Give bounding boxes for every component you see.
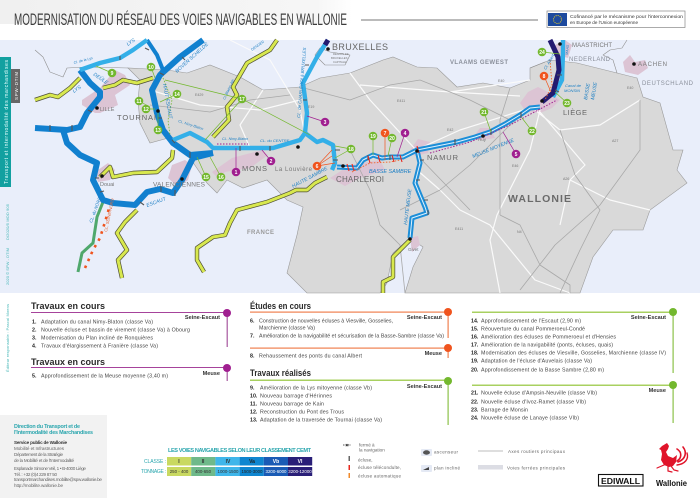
- numbered markers: 23: [564, 101, 570, 107]
- place names: MONS: [242, 164, 267, 173]
- place names: AACHEN: [638, 62, 667, 68]
- panel: travaux réalisés Seine-Escaut 9-13: 10.: [250, 394, 258, 400]
- locks: [50, 48, 562, 215]
- waterway names: Cl. de la Lys: [73, 56, 93, 65]
- place names: Douai: [100, 182, 114, 188]
- panel: travaux réalisés Meuse: Barrage de Monsin: [481, 408, 528, 414]
- waterway: yellow class I canals: [35, 40, 410, 293]
- panel: travaux réalisés Seine-Escaut 14-20: 19.: [471, 358, 479, 364]
- contact box: http://mobilite.wallonie.be: [14, 483, 63, 488]
- place names: E40: [627, 86, 633, 90]
- panel: travaux réalisés Seine-Escaut 9-13: Nouveau barrage de Kain: [260, 402, 324, 408]
- panel: travaux en cours Seine-Escaut: [31, 301, 231, 350]
- panel: travaux en cours Meuse: 5.: [32, 374, 37, 380]
- panel: travaux réalisés Seine-Escaut 14-20: Modernisation des écluses de Viesville, Gosselies, Marchienne (classe IV): [481, 350, 666, 356]
- waterway names: Cl. Albert: [543, 52, 556, 70]
- waterway names: Canal de: [565, 83, 582, 88]
- legend: waterway classes: 3200-6000: [266, 469, 287, 474]
- numbered markers: 24: [539, 50, 545, 56]
- panel: travaux réalisés Seine-Escaut 14-20: Amélioration des écluses de Pommeroeul et d'Hensies: [481, 334, 616, 340]
- legend: symbols: la navigation: [359, 448, 385, 452]
- panel: travaux réalisés Seine-Escaut 9-13: 9.: [250, 386, 255, 392]
- place names: E46: [512, 164, 518, 168]
- EU co-funding badge: [547, 11, 685, 28]
- waterway names: HAUTE SAMBRE: [291, 166, 329, 190]
- panel: travaux réalisés Seine-Escaut 9-13: 11.: [250, 402, 258, 408]
- place names: RÉGION DE: [333, 51, 349, 56]
- place names: E411: [397, 99, 405, 103]
- waterway names: DENDER: [250, 40, 265, 52]
- panel: travaux réalisés Seine-Escaut 14-20: 20.: [471, 368, 479, 374]
- panel: travaux réalisés Meuse: 21.: [471, 390, 479, 396]
- place names: N4: [517, 230, 522, 234]
- legend: symbols: Voies ferrées principales: [507, 466, 566, 470]
- panel: études en cours: 8.: [250, 354, 255, 360]
- legend: symbols: [343, 442, 566, 478]
- side label: 2020 © SPW - DTIM: [5, 248, 10, 285]
- panel: travaux réalisés Seine-Escaut 14-20: Amélioration de la navigabilité (ponts, écluses, quais): [481, 342, 613, 348]
- legend: waterway classes: 3200-12000: [288, 469, 312, 474]
- panel: travaux en cours Meuse: [31, 357, 231, 381]
- numbered markers: 3: [324, 120, 327, 126]
- panel: études en cours: Rehaussement des ponts du canal Albert: [259, 354, 363, 360]
- map: [0, 37, 700, 293]
- place names: Givet: [408, 247, 419, 252]
- legend: waterway classes: Va: [249, 459, 255, 465]
- numbered markers: 1: [235, 170, 238, 176]
- panel: travaux réalisés Seine-Escaut 9-13: Seine-Escaut: [407, 384, 442, 390]
- panel: travaux réalisés Seine-Escaut 9-13: 13.: [250, 418, 258, 424]
- place names: E429: [195, 93, 203, 97]
- panel: travaux en cours Seine-Escaut: 1.: [32, 320, 37, 326]
- panel: études en cours: Construction de nouvelles écluses à Viesville, Gosselies,: [259, 318, 393, 324]
- waterway names: BASSE SAMBRE: [369, 169, 412, 175]
- town dots: [95, 42, 636, 241]
- waterway names: HAUT ESCAUT: [161, 83, 173, 120]
- panel: travaux réalisés Seine-Escaut 14-20: 14.: [471, 318, 479, 324]
- works: dotted lines: [163, 60, 557, 172]
- place names: LIÈGE: [563, 108, 587, 117]
- side label: SPW-DTIM: [14, 72, 19, 100]
- numbered markers: 12: [143, 107, 149, 113]
- panel: études en cours: 6.: [250, 318, 255, 324]
- panel: travaux réalisés Seine-Escaut 9-13: Amélioration de la Lys mitoyenne (classe Vb): [260, 386, 372, 392]
- waterway names: MAAS: [565, 44, 570, 55]
- place names: La Louvière: [275, 167, 313, 173]
- numbered markers: 5: [515, 152, 518, 158]
- legend: waterway classes: CLASSE :: [144, 459, 166, 465]
- panel: travaux réalisés Seine-Escaut 14-20: Réouverture du canal Pommeroeul-Condé: [481, 326, 585, 332]
- numbered markers: 21: [481, 110, 487, 116]
- panel: travaux en cours Seine-Escaut: Seine-Escaut: [185, 315, 220, 321]
- side label: Éditeur responsable : Pascal Moens: [5, 304, 10, 372]
- panel: travaux réalisés Seine-Escaut 14-20: 17.: [471, 342, 479, 348]
- panel: travaux réalisés Seine-Escaut 9-13: 12.: [250, 410, 258, 416]
- panel: études en cours: [250, 301, 452, 360]
- side label: D/2020/5 MOD 905: [5, 203, 10, 240]
- panel: études en cours: Seine-Escaut: [407, 315, 442, 321]
- panel: travaux en cours Seine-Escaut: Travaux en cours: [31, 301, 105, 312]
- place names: CHARLEROI: [336, 175, 384, 184]
- numbered markers: 19: [370, 134, 376, 140]
- legend: symbols: Axes routiers principaux: [508, 449, 566, 454]
- legend: symbols: ×: [345, 443, 349, 449]
- waterway names: ESCAUT: [146, 196, 168, 209]
- waterway names: MONSIN: [564, 88, 580, 93]
- waterway names: BOVEN SCHELDE: [174, 41, 210, 74]
- contact box: Esplanade Simone Veil, 1 • B-4000 Liège: [14, 466, 86, 471]
- panel: études en cours: Meuse: [425, 351, 442, 357]
- place names: E19: [308, 105, 314, 109]
- panel: travaux réalisés Meuse: Meuse: [649, 388, 666, 394]
- legend: symbols: écluse automatique: [358, 474, 401, 478]
- waterway names: CL. Nimy-Blaton: [178, 119, 204, 131]
- place names: VALENCIENNES: [153, 182, 206, 188]
- place names: E42: [447, 128, 453, 132]
- legend: waterway classes: 1000-1500: [218, 469, 239, 474]
- numbered markers: 13: [155, 128, 161, 134]
- place names: [100, 42, 694, 252]
- panel: travaux réalisés Meuse: Nouvelle écluse de Lanaye (classe VIb): [481, 416, 579, 422]
- panel: travaux en cours Meuse: Travaux en cours: [31, 357, 105, 368]
- numbered markers: 17: [239, 97, 245, 103]
- numbered markers: 22: [529, 129, 535, 135]
- panel: travaux réalisés Seine-Escaut 14-20: Adaptation de l'écluse d'Auvelais (classe Va): [481, 358, 592, 364]
- legend: waterway classes: TONNAGE :: [141, 469, 166, 475]
- contact box: Tél. : +32 (0)4 229 87 50: [14, 472, 57, 477]
- waterway names: Cl. Blaton-Ath: [222, 79, 235, 100]
- place names: VLAAMS GEWEST: [450, 60, 508, 66]
- panel: travaux réalisés Seine-Escaut 14-20: Approfondissement de la Basse Sambre (2,80 m): [481, 368, 604, 374]
- waterway: green class II canal: [78, 202, 103, 272]
- leader lines: [96, 52, 567, 177]
- place names: NAMUR: [427, 153, 459, 162]
- panel: études en cours: Études en cours: [250, 301, 311, 312]
- place names: TOURNAI: [117, 113, 156, 122]
- panel: travaux réalisés Meuse: 24.: [471, 416, 479, 422]
- numbered markers: 2: [270, 159, 273, 165]
- legend: waterway classes: 250 - 400: [170, 469, 189, 474]
- legend: waterway classes: I: [178, 459, 180, 465]
- legend: waterway classes: Vb: [273, 459, 279, 465]
- panel: travaux réalisés Seine-Escaut 14-20: Seine-Escaut: [631, 315, 666, 321]
- waterway names: CL. de CHARLEROI à BRUXELLES: [296, 47, 307, 118]
- waterway: light blue class IV canals: [80, 40, 563, 170]
- contact box: l'Intermodalité des Marchandises: [14, 430, 93, 436]
- panel: travaux réalisés Meuse: 23.: [471, 408, 479, 414]
- EU co-funding badge: Cofinancé par le mécanisme pour l'interconnexion: [570, 14, 684, 19]
- place names: FRANCE: [247, 230, 274, 236]
- logo: Wallonie rooster: [656, 443, 688, 488]
- red closed-lock ticks: [347, 146, 419, 171]
- place names: A26: [563, 177, 569, 181]
- numbered markers: 11: [136, 99, 142, 105]
- panel: travaux réalisés Seine-Escaut 14-20: 15.: [471, 326, 479, 332]
- contact box: Service public de Wallonie: [14, 440, 67, 445]
- panel: études en cours: Amélioration de la navigabilité et sécurisation de la Basse-Sambre (classe Va): [259, 334, 444, 340]
- panel: travaux réalisés Seine-Escaut 9-13: Nouveau barrage d'Hérinnes: [260, 394, 332, 400]
- panel: travaux en cours Seine-Escaut: Adaptation du canal Nimy-Blaton (classe Va): [41, 320, 153, 326]
- side label: [0, 57, 20, 372]
- panel: études en cours: 7.: [250, 334, 255, 340]
- place names: E411: [455, 227, 463, 231]
- place names: LILLE: [100, 107, 115, 113]
- EU co-funding badge: en Europe de l'Union européenne: [570, 20, 639, 25]
- waterway names: BASSE: [583, 82, 592, 100]
- panel: travaux réalisés Seine-Escaut 9-13: Travaux réalisés: [250, 368, 311, 379]
- logo: Ediwall: EDIWALL: [601, 476, 640, 486]
- place names: WALLONIE: [508, 193, 571, 205]
- waterway names: CL. Nimy-Blaton: [222, 137, 248, 141]
- contact box: transportmarchandises.mobilite@spw.wallonie.be: [14, 477, 102, 482]
- numbered markers: 14: [174, 92, 180, 98]
- place names: Huy: [478, 137, 487, 142]
- legend: symbols: ascenseur: [434, 450, 458, 454]
- numbered markers: 10: [148, 65, 154, 71]
- legend: symbols: plan incliné: [434, 466, 460, 470]
- waterway names: LYS: [72, 84, 83, 95]
- place names: DEUTSCHLAND: [642, 81, 694, 87]
- contact box: de la Mobilité et de l'Intermodalité: [14, 458, 74, 463]
- numbered markers: 9: [111, 71, 114, 77]
- region: Wallonie: [128, 57, 687, 293]
- legend: waterway classes: 400-650: [195, 469, 212, 474]
- place names: BRUXELLES: [332, 42, 388, 52]
- panel: travaux en cours Meuse: Approfondissement de la Meuse moyenne (3,40 m): [41, 374, 168, 380]
- title: MODERNISATION DU RÉSEAU DES VOIES NAVIGABLES EN WALLONIE: [14, 10, 347, 29]
- place names: MAASTRICHT: [572, 43, 612, 49]
- panel: travaux en cours Seine-Escaut: 2.: [32, 328, 37, 334]
- panel: travaux en cours Seine-Escaut: 4.: [32, 344, 37, 350]
- numbered markers: 16: [218, 175, 224, 181]
- numbered markers: 8: [543, 74, 546, 80]
- waterway names: LYS: [126, 37, 137, 48]
- panel: travaux réalisés Meuse: Nouvelle écluse d'Ampsin-Neuville (classe VIb): [481, 390, 597, 396]
- panel: travaux réalisés Seine-Escaut 14-20: 16.: [471, 334, 479, 340]
- contact box: [0, 415, 107, 498]
- panel: travaux réalisés Meuse: [471, 381, 677, 423]
- panel: travaux réalisés Seine-Escaut 9-13: Reconstruction du Pont des Trous: [260, 410, 344, 416]
- waterway names: [72, 37, 599, 232]
- numbered markers: 7: [384, 131, 387, 137]
- numbered markers: 4: [404, 131, 407, 137]
- waterway names: MEUSE MOYENNE: [472, 137, 516, 160]
- legend: waterway classes: IV: [226, 459, 231, 465]
- waterway names: DEÛLE: [92, 71, 110, 87]
- legend: waterway classes: LES VOIES NAVIGABLES SELON LEUR CLASSEMENT CEMT: [168, 448, 312, 454]
- borders: [35, 40, 627, 77]
- logo: Wallonie rooster: Wallonie: [656, 479, 688, 488]
- panel: travaux en cours Seine-Escaut: 3.: [32, 336, 37, 342]
- panel: travaux réalisés Seine-Escaut 9-13: [250, 368, 452, 425]
- legend: symbols: écluse télécondulte,: [358, 465, 401, 470]
- numbered markers: 15: [203, 175, 209, 181]
- legend: waterway classes: II: [202, 459, 205, 465]
- numbered markers: 6: [316, 164, 319, 170]
- place names: E40: [498, 79, 504, 83]
- numbered markers: 20: [389, 136, 395, 142]
- panel: travaux réalisés Seine-Escaut 9-13: Adaptation de la traversée de Tournai (classe Va): [260, 418, 382, 424]
- place names: CAPITALE: [333, 60, 346, 64]
- urban areas: [82, 40, 648, 252]
- panel: travaux en cours Seine-Escaut: Travaux d'élargissement à Franière (classe Va): [41, 344, 158, 350]
- contact box: Département de la Stratégie: [14, 452, 63, 457]
- place names: NEDERLAND: [569, 57, 611, 63]
- panel: travaux en cours Seine-Escaut: Modernisation du Plan incliné de Ronquières: [41, 336, 153, 342]
- waterway names: MEUSE: [590, 81, 599, 100]
- panel: études en cours: Marchienne (classe Va): [259, 326, 315, 332]
- roads: [150, 40, 650, 293]
- legend: symbols: écluse,: [358, 458, 373, 462]
- panel: travaux réalisés Meuse: 22.: [471, 400, 479, 406]
- waterway names: CL. du CENTRE: [260, 138, 290, 143]
- legend: waterway classes: 1500-3000: [242, 469, 263, 474]
- contact box: Direction du Transport et de: [14, 424, 80, 430]
- numbered markers: 18: [348, 147, 354, 153]
- panel: travaux réalisés Seine-Escaut 14-20: [471, 308, 677, 374]
- waterway: Sambre and Meuse: [337, 107, 540, 238]
- legend: symbols: fermé à: [359, 442, 375, 448]
- contact box: Mobilité et Infrastructures: [14, 446, 65, 451]
- legend: waterway classes: VI: [298, 459, 303, 465]
- place names: A27: [612, 139, 618, 143]
- panel: travaux réalisés Seine-Escaut 14-20: Approfondissement de l'Escaut (2,90 m): [481, 318, 581, 324]
- panel: travaux réalisés Meuse: Nouvelle écluse d'Ivoz-Ramet (classe VIb): [481, 400, 586, 406]
- waterway names: CL. du NORD: [88, 195, 102, 223]
- numbered markers: [108, 48, 571, 181]
- side label: Transport et intermodalité des marchandises: [4, 60, 10, 184]
- waterway: planned Seine-Nord route: [85, 205, 110, 268]
- panel: travaux en cours Meuse: Meuse: [203, 371, 220, 377]
- waterway: dark blue class Va main lines: [35, 40, 213, 205]
- panel: travaux réalisés Seine-Escaut 14-20: 18.: [471, 350, 479, 356]
- panel: travaux en cours Seine-Escaut: Nouvelle écluse et bassin de virement (classe Va) à Obourg: [41, 328, 190, 334]
- waterway: dark navy class VI: [325, 40, 559, 102]
- legend: waterway classes: [141, 448, 312, 476]
- place names: BRUXELLES: [331, 56, 348, 60]
- waterway names: HAUTE MEUSE: [403, 188, 413, 225]
- waterway names: CL. SEINE-NORD: [103, 198, 115, 232]
